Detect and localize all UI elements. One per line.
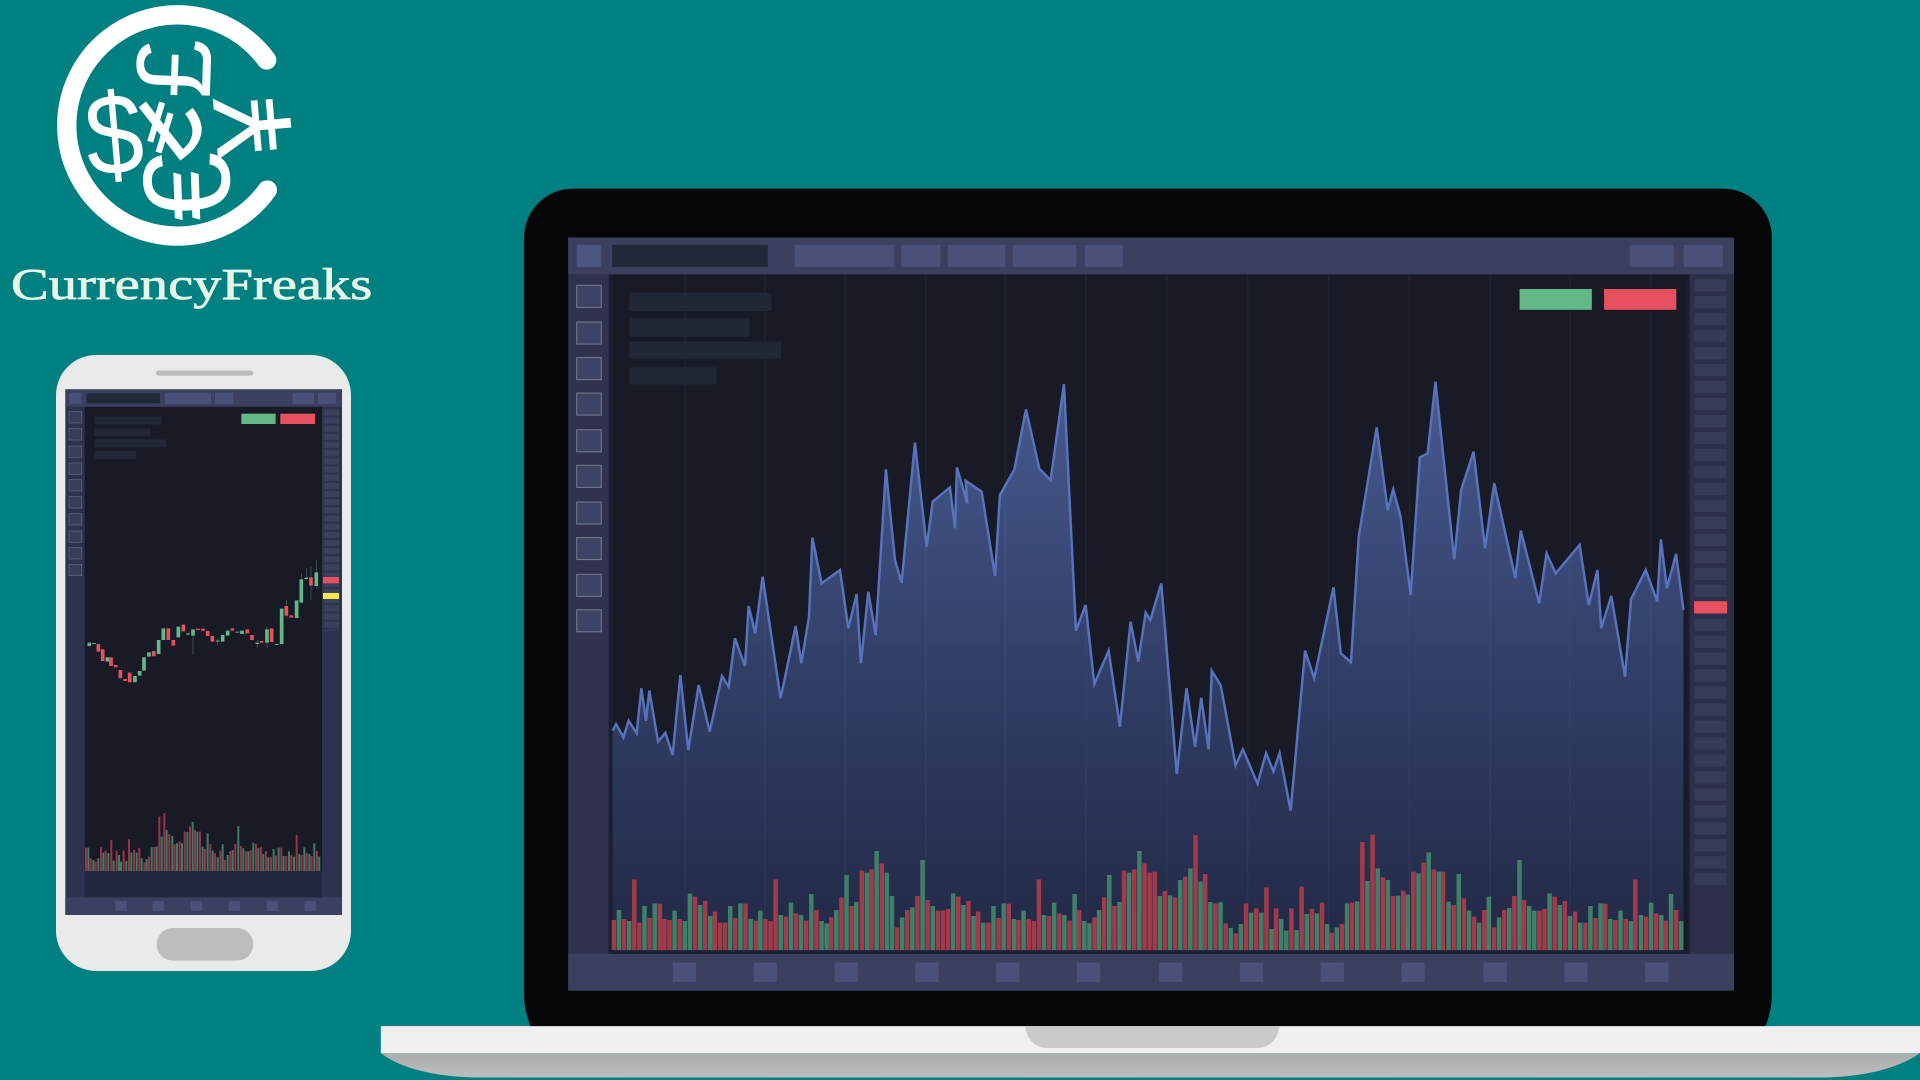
- phone price marker yellow: [323, 593, 339, 599]
- logo wordmark: CurrencyFreaks: [11, 260, 372, 309]
- logo icon: C ring with currency symbols: €: [117, 150, 257, 223]
- laptop lid: [524, 189, 1772, 1029]
- laptop notch: [1025, 1026, 1280, 1048]
- laptop mockup: [381, 189, 1920, 1078]
- phone left tool squares: [69, 412, 82, 576]
- logo icon: C ring with currency symbols: [67, 15, 317, 236]
- ghost legend bars: [629, 293, 781, 384]
- laptop base tray: [381, 1053, 1920, 1078]
- chart frame: [609, 274, 1690, 954]
- phone top toolbar: [65, 389, 342, 407]
- phone price marker red: [323, 577, 339, 583]
- phone price axis ticks: [308, 409, 354, 631]
- price marker: [1694, 601, 1727, 613]
- logo icon: C ring with currency symbols: £: [113, 37, 235, 100]
- volume bars, left half: [614, 851, 1120, 950]
- phone chart lower band: [85, 871, 322, 897]
- left tool squares: [577, 285, 601, 632]
- bottom toolbar: [568, 954, 1734, 991]
- laptop screen: [568, 238, 1734, 991]
- phone body: [56, 355, 351, 971]
- phone bottom toolbar: [65, 897, 342, 915]
- area chart line: [613, 382, 1683, 811]
- phone screen: [65, 389, 342, 915]
- phone chart background: [85, 407, 322, 897]
- phone volume bars: [86, 813, 319, 871]
- phone sell button: [280, 414, 315, 424]
- right price panel: [1690, 274, 1734, 954]
- phone home button: [157, 928, 253, 961]
- chart background: [612, 274, 1687, 951]
- volume bars, right half: [1124, 835, 1681, 950]
- logo icon: C ring with currency symbols: $: [80, 69, 148, 201]
- laptop base top: [381, 1026, 1920, 1053]
- logo icon: C ring with currency symbols: ₺: [116, 65, 229, 187]
- phone speaker: [156, 371, 253, 376]
- phone candlestick chart: [89, 560, 316, 682]
- phone mockup: [56, 355, 351, 971]
- phone buy button: [241, 414, 276, 424]
- top toolbar: [568, 238, 1734, 274]
- area chart fill: [613, 382, 1683, 951]
- logo: CurrencyFreaks: [11, 15, 372, 309]
- sell button: [1604, 289, 1676, 310]
- buy button: [1520, 289, 1592, 310]
- price axis ticks: [1698, 279, 1724, 885]
- phone ghost legend bars: [94, 417, 166, 459]
- logo icon: C ring with currency symbols: ¥: [189, 89, 317, 163]
